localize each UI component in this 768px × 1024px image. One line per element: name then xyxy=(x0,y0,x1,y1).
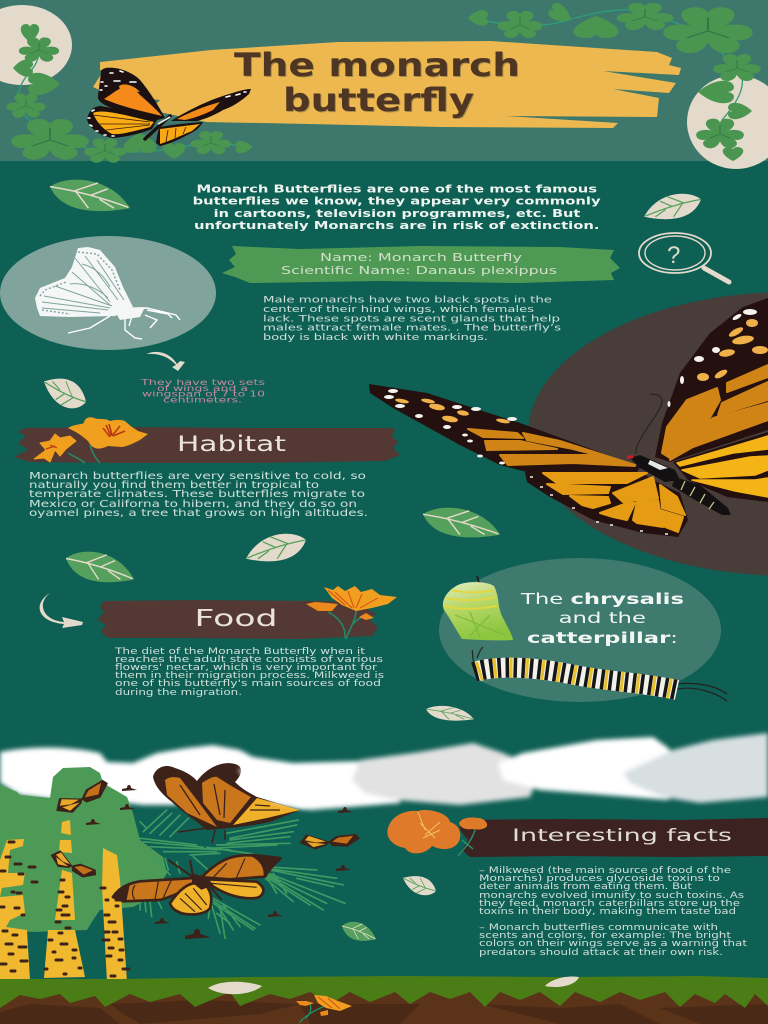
icon: pine branches xyxy=(140,810,345,938)
leaf: green top xyxy=(50,180,130,211)
vine: left xyxy=(4,24,253,164)
facts heading: Interesting facts xyxy=(512,826,732,846)
title xyxy=(234,46,520,119)
thorax and abdomen xyxy=(630,455,680,482)
wingspan note: wingspan of 7 to 10 xyxy=(142,390,265,398)
arrow: to food xyxy=(40,593,83,628)
habitat paragraph: Monarch butterflies are very sensitive to cold, so xyxy=(29,471,366,482)
name text: Name: Monarch Butterfly xyxy=(320,251,523,264)
title: The monarch xyxy=(234,46,520,84)
icon: large monarch butterfly xyxy=(369,298,768,537)
facts paragraph two: colors on their wings serve as a warning that xyxy=(479,939,748,949)
soil shading xyxy=(0,1000,768,1024)
icon: habitat flowers xyxy=(34,417,148,463)
icon: small butterfly on trunk xyxy=(48,842,98,888)
icon: ground flower xyxy=(296,995,352,1023)
facts paragraph one: deter animals from eating them. But xyxy=(479,882,693,892)
food paragraph xyxy=(114,647,385,698)
habitat banner xyxy=(14,427,400,463)
male monarch paragraph: center of their hind wings, which females xyxy=(263,305,535,315)
leaf: green lower xyxy=(66,552,134,582)
icon: large butterfly in flight xyxy=(113,855,281,914)
food paragraph: reaches the adult state consists of various xyxy=(115,655,384,665)
ground grass xyxy=(0,976,768,1008)
icon: small butterfly right xyxy=(300,827,360,855)
chrysalis heading: catterpillar : xyxy=(527,629,678,647)
left hindwing xyxy=(525,472,688,537)
icon: magnifying glass with question mark: ? xyxy=(667,242,680,269)
icon: small butterfly upper left xyxy=(53,779,112,815)
name text xyxy=(281,251,557,277)
name banner xyxy=(222,246,620,283)
clouds xyxy=(0,733,768,810)
facts paragraph one: Monarchs) produces glycoside toxins to xyxy=(479,874,720,884)
icon: caterpillar xyxy=(472,647,727,701)
habitat heading: Habitat xyxy=(177,432,286,456)
facts paragraph two xyxy=(479,923,748,958)
icon: food flowers xyxy=(306,586,397,639)
intro paragraph: butterflies we know, they appear very commonly xyxy=(193,195,601,208)
intro paragraph: in cartoons, television programmes, etc. But xyxy=(214,207,580,220)
food heading: Food xyxy=(194,606,278,632)
title: butterfly xyxy=(283,81,474,119)
circle: butterfly sketch background xyxy=(0,236,216,350)
vine: top right xyxy=(468,1,763,161)
decorative cream blob left xyxy=(0,5,72,85)
header band xyxy=(0,0,768,161)
habitat paragraph: Mexico or Californa to hibern, and they do so on xyxy=(29,499,357,510)
right hindwing xyxy=(673,432,768,502)
leaf: green bottom xyxy=(342,922,376,941)
facts paragraph one: – Milkweed (the main source of food of the xyxy=(479,866,731,876)
food paragraph: them in their migration process. Milkweed is xyxy=(115,671,385,681)
facts paragraph one: toxins in their body, making them taste bad xyxy=(479,907,736,917)
male monarch paragraph: Male monarchs have two black spots in the xyxy=(263,296,552,306)
ground soil xyxy=(0,990,768,1024)
title brush stroke xyxy=(93,41,681,128)
leaf: cream middle xyxy=(246,534,306,561)
wingspan note: of wings and a xyxy=(157,384,248,393)
chrysalis heading: The chrysalis xyxy=(520,590,684,608)
habitat paragraph: temperate climates. These butterflies migrate to xyxy=(29,489,365,500)
facts paragraph one xyxy=(479,866,745,917)
arrow: to wing text xyxy=(146,352,185,371)
left forewing xyxy=(369,384,640,472)
food paragraph: The diet of the Monarch Butterfly when it xyxy=(114,647,366,657)
food paragraph: during the migration. xyxy=(115,688,242,698)
antennae xyxy=(636,394,662,454)
habitat paragraph: naturally you find them better in tropical to xyxy=(29,480,319,491)
facts paragraph two: – Monarch butterflies communicate with xyxy=(479,923,718,933)
icon: magnifying glass with question mark xyxy=(639,233,729,282)
cloud patch over butterfly xyxy=(238,765,310,808)
icon: forest trees xyxy=(0,767,167,982)
intro paragraph xyxy=(193,182,601,232)
food paragraph: flowers' nectar, which is very important for xyxy=(115,663,378,673)
leaf: cream left xyxy=(44,379,86,408)
name text: Scientific Name: Danaus plexippus xyxy=(281,264,557,277)
decorative cream blob right xyxy=(687,75,768,169)
facts paragraph one: monarchs evolved imunity to such toxins. As xyxy=(479,891,745,901)
icon: header butterfly xyxy=(87,68,251,146)
chrysalis heading xyxy=(520,590,684,647)
icon: distant birds xyxy=(86,785,353,939)
leaf: cream top xyxy=(644,194,701,219)
food banner xyxy=(98,600,378,639)
leaf: cream small xyxy=(426,706,474,721)
facts paragraph two: predators should attack at their own risk. xyxy=(479,948,723,958)
chrysalis heading: and the xyxy=(559,609,646,627)
right forewing xyxy=(655,298,768,462)
dark circle behind large butterfly xyxy=(528,292,768,576)
male monarch paragraph: lack. These spots are scent glands that help xyxy=(263,314,561,324)
intro paragraph: unfortunately Monarchs are in risk of extinction. xyxy=(194,219,600,232)
habitat paragraph xyxy=(29,471,368,519)
icon: white butterfly sketch xyxy=(35,247,180,339)
icon: orange poppies xyxy=(387,810,487,856)
facts banner xyxy=(460,818,768,857)
wingspan note xyxy=(139,378,265,404)
facts paragraph two: scents and colors, for example: The bright xyxy=(479,931,732,941)
leaf: green middle xyxy=(423,508,500,537)
wingspan note: They have two sets xyxy=(139,378,265,387)
facts paragraph one: they feed, monarch caterpillars store up the xyxy=(479,899,740,909)
icon: large butterfly on branch xyxy=(153,763,300,843)
intro paragraph: Monarch Butterflies are one of the most famous xyxy=(196,182,598,196)
leaf: cream facts xyxy=(403,876,436,895)
food paragraph: one of this butterfly's main sources of food xyxy=(115,679,381,689)
male monarch paragraph: body is black with white markings. xyxy=(263,333,488,343)
leaf: cream on ground right xyxy=(545,977,579,987)
icon: chrysalis xyxy=(443,576,513,640)
male monarch paragraph xyxy=(263,296,562,343)
wingspan note: centimeters. xyxy=(163,396,242,404)
leaf: cream on ground left xyxy=(208,982,262,994)
habitat paragraph: oyamel pines, a tree that grows on high altitudes. xyxy=(29,508,368,519)
male monarch paragraph: males attract female mates. . The butterfly’s xyxy=(263,324,562,334)
chrysalis circle xyxy=(439,558,721,702)
